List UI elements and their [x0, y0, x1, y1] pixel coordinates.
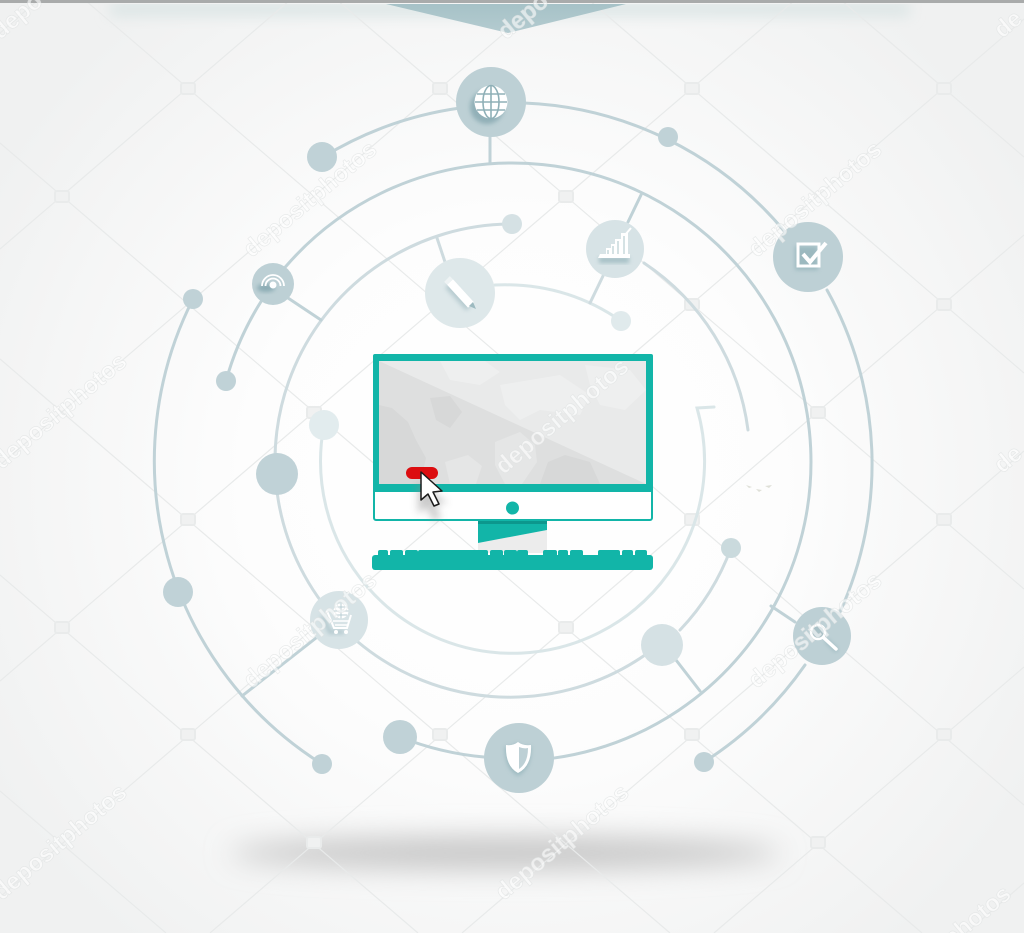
icon: shopping cart — [310, 591, 368, 649]
small birds mark — [746, 485, 772, 492]
monitor — [373, 354, 653, 553]
icon: globe — [456, 67, 526, 137]
icon: bar chart — [586, 220, 644, 278]
third ring segments — [275, 224, 748, 697]
keyboard — [372, 550, 653, 570]
watermark text: depositphotos — [490, 353, 634, 480]
watermark text: depositphotos — [238, 136, 382, 263]
small nodes — [163, 127, 741, 774]
icon: checkbox — [773, 222, 843, 292]
watermark text: depositphotos — [238, 567, 382, 694]
monitor stand — [478, 521, 547, 553]
top pennant — [386, 4, 626, 33]
top edge line — [0, 0, 1024, 3]
connector spokes — [242, 135, 795, 696]
inner ring segments — [321, 285, 714, 653]
icon: wifi signal — [252, 263, 294, 305]
watermark icons: cameras — [55, 83, 951, 848]
red button — [406, 467, 438, 479]
outer ring segments — [154, 103, 872, 764]
icon: pencil — [425, 258, 495, 328]
watermark text: depositphotos — [743, 567, 887, 694]
monitor screen with world map — [379, 361, 646, 484]
icon: shield — [484, 723, 554, 793]
icon: mouse cursor — [418, 472, 448, 521]
top band shadow — [110, 2, 910, 16]
watermark text: depositphotos — [490, 779, 634, 906]
icon: magnifier — [793, 607, 851, 665]
network rings — [154, 103, 872, 764]
floor shadow — [230, 837, 780, 869]
watermark text: depositphotos — [743, 136, 887, 263]
monitor power button — [506, 502, 519, 514]
monitor body — [374, 355, 652, 520]
second ring segments — [226, 163, 811, 758]
